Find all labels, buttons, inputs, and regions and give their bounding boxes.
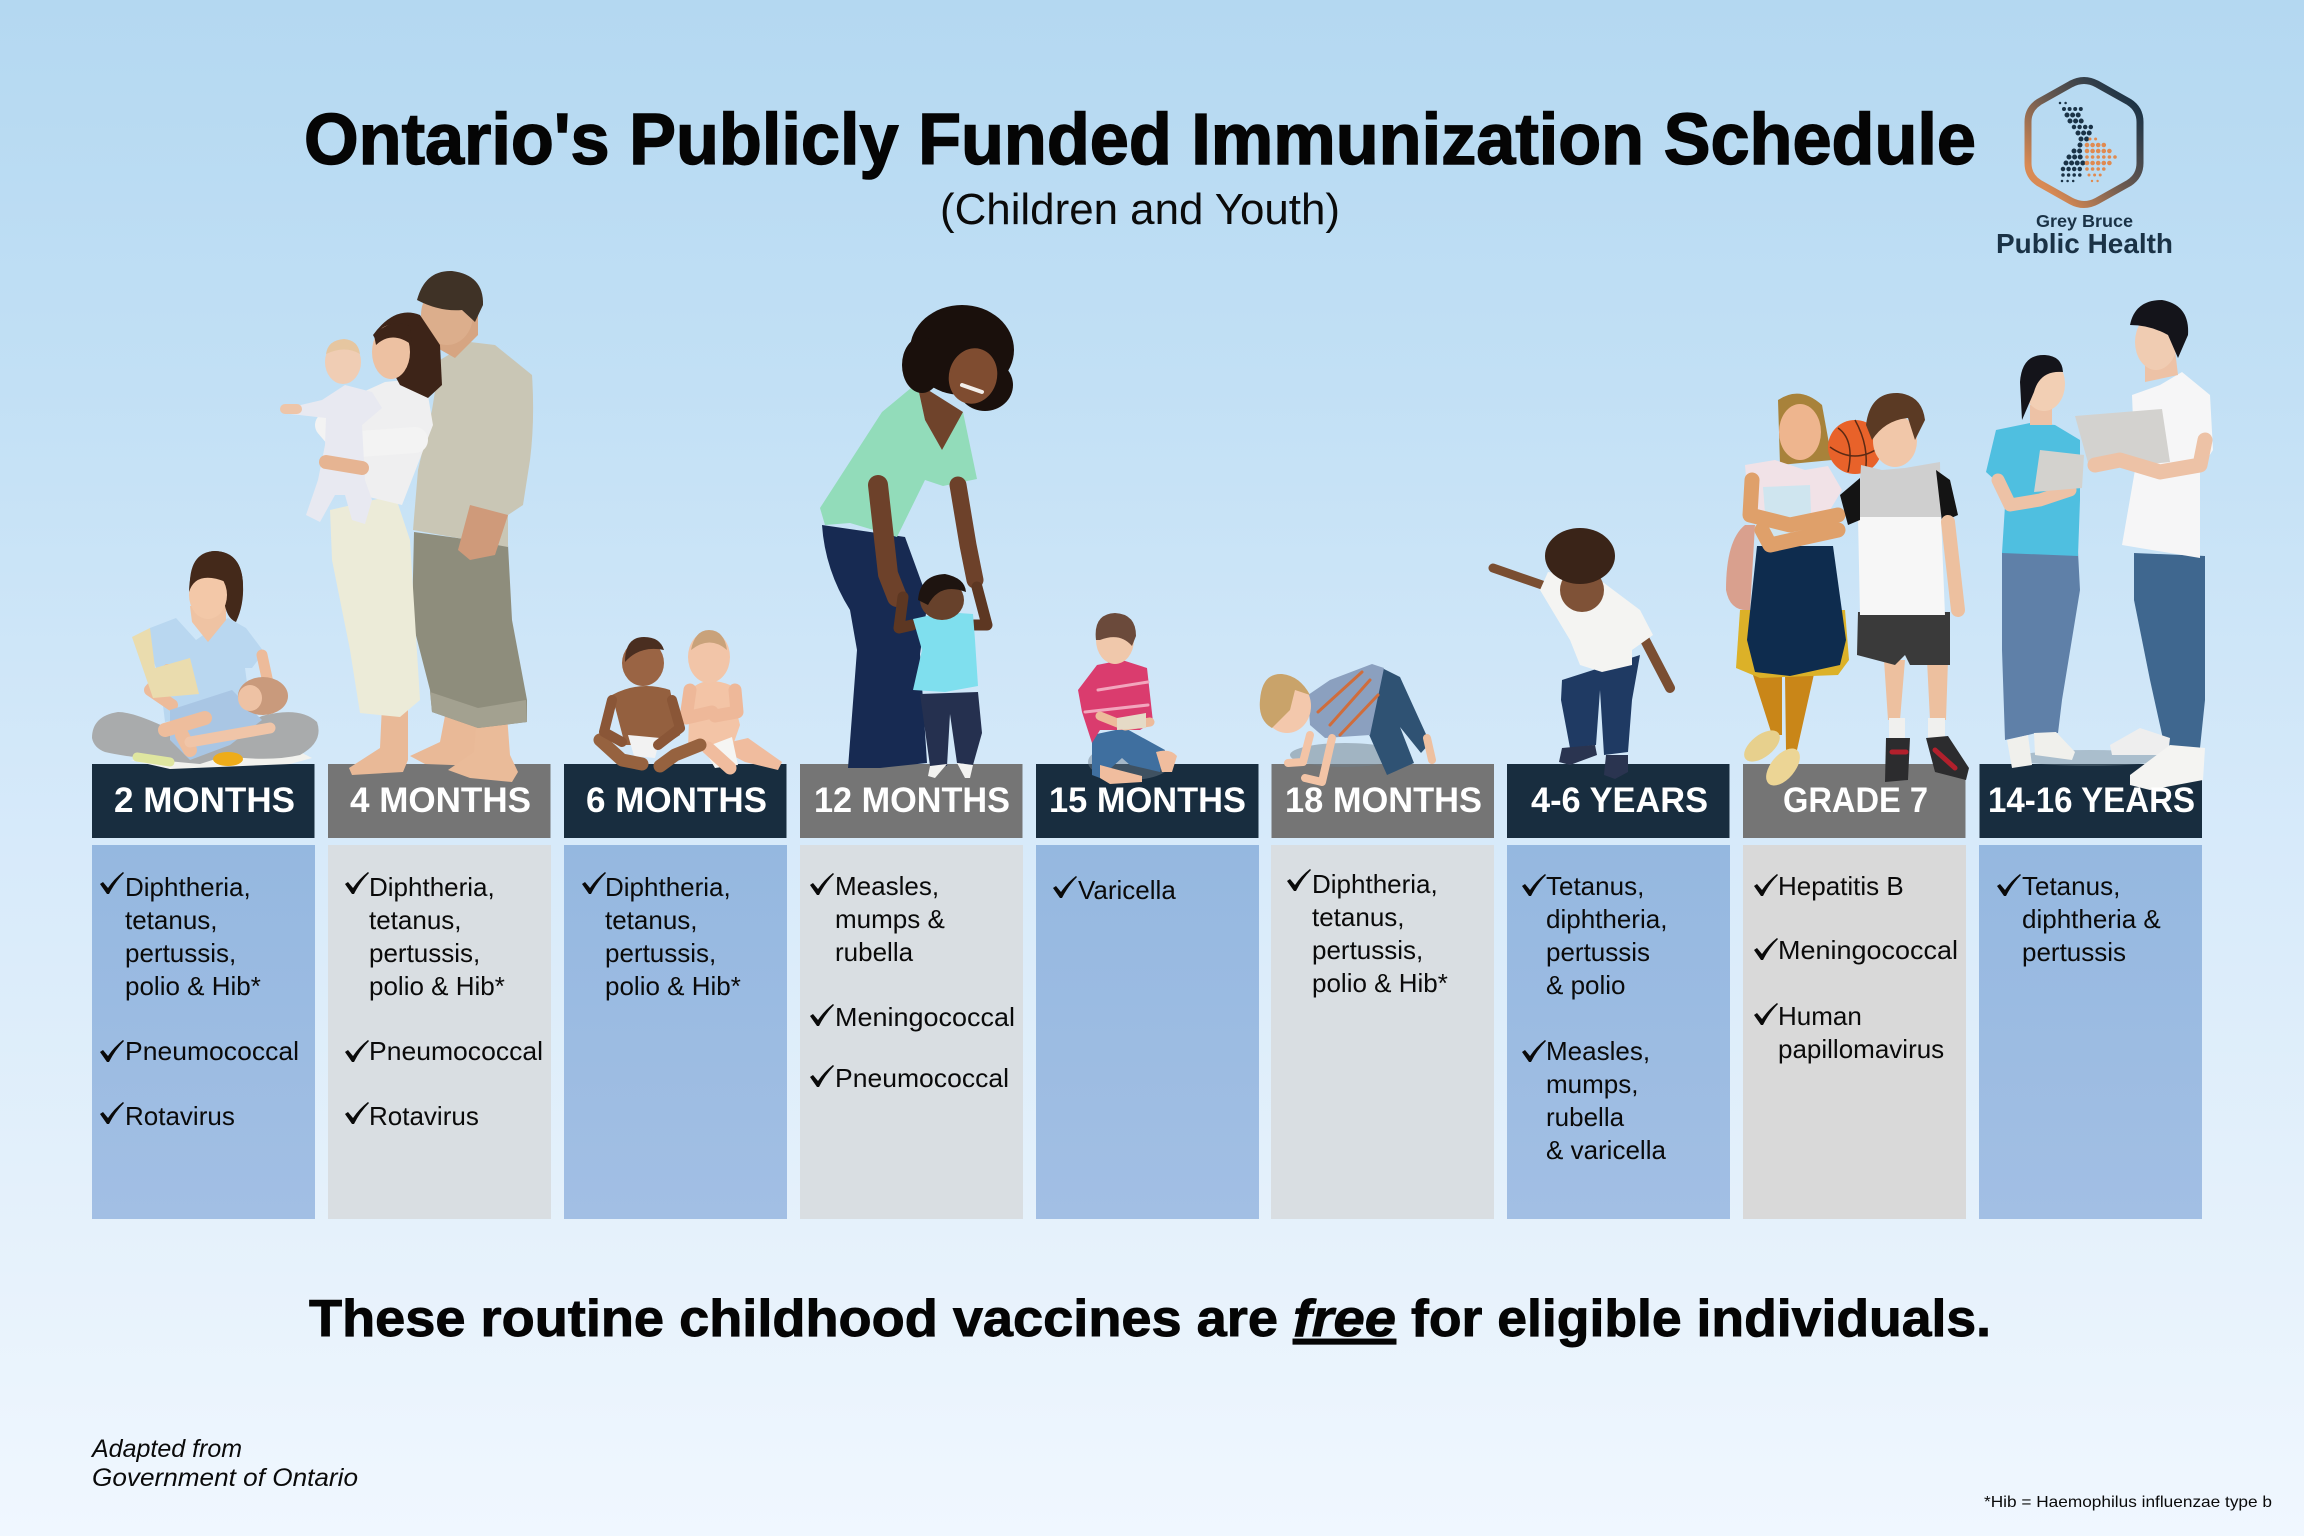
vaccine list: grade 7: Meningococcal — [1778, 935, 1958, 965]
header label: 15 months: 15 MONTHS — [1049, 781, 1246, 820]
figure: mother walking toddler — [820, 305, 1014, 778]
header band: 6 months — [564, 764, 786, 838]
vaccine list: grade 7: Hepatitis B — [1778, 871, 1904, 901]
vaccine list: 4-6 years: Measles, — [1546, 1036, 1650, 1066]
footnote: *Hib = Haemophilus influenzae type b — [1984, 1494, 2272, 1511]
vaccine list: 2 months: tetanus, — [125, 905, 218, 935]
header band: 4 months — [328, 764, 550, 838]
vaccine list: 18 months: polio & Hib* — [1312, 968, 1448, 998]
vaccine list: 2 months: Pneumococcal — [125, 1036, 299, 1066]
figure: girl and boy with basketball — [1726, 393, 1969, 792]
vaccine list: 12 months: Measles, — [835, 871, 939, 901]
vaccine list: 4 months — [345, 872, 543, 1131]
header label: 18 months: 18 MONTHS — [1285, 781, 1482, 820]
header band: 14-16 years — [1980, 764, 2202, 838]
header band: 2 months — [92, 764, 314, 838]
vaccine list: grade 7 — [1754, 871, 1958, 1064]
source note — [90, 1435, 358, 1492]
vaccine list: 12 months: rubella — [835, 937, 914, 967]
vaccine list: grade 7: Human — [1778, 1001, 1862, 1031]
vaccine list: grade 7: papillomavirus — [1778, 1034, 1944, 1064]
figure: mother reading with baby — [92, 551, 319, 769]
title: Ontario's Publicly Funded Immunization Schedule — [304, 100, 1976, 180]
vaccine list: 2 months — [100, 872, 299, 1131]
vaccine list: 6 months: pertussis, — [605, 938, 716, 968]
figure: parents holding baby — [285, 271, 533, 782]
panel: 2 months — [92, 845, 315, 1219]
header band: grade 7 — [1743, 764, 1966, 838]
subtitle: (Children and Youth) — [940, 186, 1340, 234]
vaccine list: 14-16 years: Tetanus, — [2022, 871, 2120, 901]
closing statement: free — [1293, 1290, 1396, 1348]
panel: grade 7 — [1743, 845, 1966, 1219]
vaccine list: 6 months: Diphtheria, — [605, 872, 731, 902]
logo: Grey Bruce Public Health: Public Health — [1996, 228, 2173, 259]
closing statement — [309, 1290, 1991, 1348]
vaccine list: 4-6 years: pertussis — [1546, 937, 1650, 967]
vaccine list: 14-16 years — [1997, 871, 2161, 967]
vaccine list: 18 months: Diphtheria, — [1312, 869, 1438, 899]
vaccine list: 18 months — [1287, 869, 1448, 998]
vaccine list: 4-6 years: mumps, — [1546, 1069, 1638, 1099]
vaccine list: 4-6 years: rubella — [1546, 1102, 1625, 1132]
figure: seated toddler with blocks — [1078, 613, 1177, 784]
vaccine list: 4-6 years: & polio — [1546, 970, 1626, 1000]
panel: 18 months — [1271, 845, 1494, 1219]
panel: 4 months — [328, 845, 551, 1219]
figure: crawling toddler — [1260, 664, 1432, 782]
vaccine list: 2 months: pertussis, — [125, 938, 236, 968]
vaccine list: 2 months: Rotavirus — [125, 1101, 235, 1131]
header band: 12 months — [800, 764, 1022, 838]
figure: two seated babies — [600, 630, 782, 770]
vaccine list: 4-6 years: Tetanus, — [1546, 871, 1644, 901]
panel: 4-6 years — [1507, 845, 1730, 1219]
vaccine list: 4-6 years: diphtheria, — [1546, 904, 1667, 934]
panel: 14-16 years — [1979, 845, 2202, 1219]
vaccine list: 4-6 years — [1522, 871, 1667, 1165]
vaccine list: 12 months: Pneumococcal — [835, 1063, 1009, 1093]
closing statement: These routine childhood vaccines are — [309, 1290, 1278, 1348]
figure: two teens with laptop and tablet — [1986, 300, 2213, 790]
vaccine list: 14-16 years: pertussis — [2022, 937, 2126, 967]
vaccine list: 12 months: Meningococcal — [835, 1002, 1015, 1032]
vaccine list: 6 months — [582, 872, 741, 1001]
vaccine list: 4 months: polio & Hib* — [369, 971, 505, 1001]
vaccine list: 18 months: pertussis, — [1312, 935, 1423, 965]
vaccine list: 6 months: polio & Hib* — [605, 971, 741, 1001]
vaccine list: 2 months: polio & Hib* — [125, 971, 261, 1001]
logo: Grey Bruce Public Health — [1996, 80, 2173, 259]
header label: 14-16 years: 14-16 YEARS — [1988, 781, 2195, 820]
header label: 4 months: 4 MONTHS — [350, 781, 531, 820]
panel: 12 months — [800, 845, 1023, 1219]
vaccine list: 14-16 years: diphtheria & — [2022, 904, 2161, 934]
vaccine list: 12 months — [810, 871, 1015, 1093]
logo: Grey Bruce Public Health: Grey Bruce — [2036, 211, 2133, 231]
source note: Government of Ontario — [92, 1464, 358, 1492]
closing statement: for eligible individuals. — [1411, 1290, 1991, 1348]
source note: Adapted from — [90, 1435, 242, 1463]
panel: 6 months — [564, 845, 787, 1219]
vaccine list: 4-6 years: & varicella — [1546, 1135, 1666, 1165]
vaccine list: 6 months: tetanus, — [605, 905, 698, 935]
vaccine list: 2 months: Diphtheria, — [125, 872, 251, 902]
header band: 4-6 years — [1507, 764, 1730, 838]
vaccine list: 4 months: pertussis, — [369, 938, 480, 968]
vaccine list: 4 months: Pneumococcal — [369, 1036, 543, 1066]
header band: 15 months — [1036, 764, 1258, 838]
vaccine list: 12 months: mumps & — [835, 904, 945, 934]
vaccine list: 4 months: tetanus, — [369, 905, 462, 935]
panel: 15 months — [1036, 845, 1259, 1219]
figure: jumping child — [1493, 528, 1670, 779]
vaccine list: 4 months: Diphtheria, — [369, 872, 495, 902]
vaccine list: 4 months: Rotavirus — [369, 1101, 479, 1131]
vaccine list: 15 months: Varicella — [1078, 875, 1176, 905]
header label: 12 months: 12 MONTHS — [814, 781, 1010, 820]
header label: 6 months: 6 MONTHS — [586, 781, 767, 820]
header label: grade 7: GRADE 7 — [1783, 781, 1928, 820]
header label: 2 months: 2 MONTHS — [114, 781, 295, 820]
header label: 4-6 years: 4-6 YEARS — [1531, 781, 1708, 820]
header band: 18 months — [1272, 764, 1494, 838]
vaccine list: 18 months: tetanus, — [1312, 902, 1405, 932]
